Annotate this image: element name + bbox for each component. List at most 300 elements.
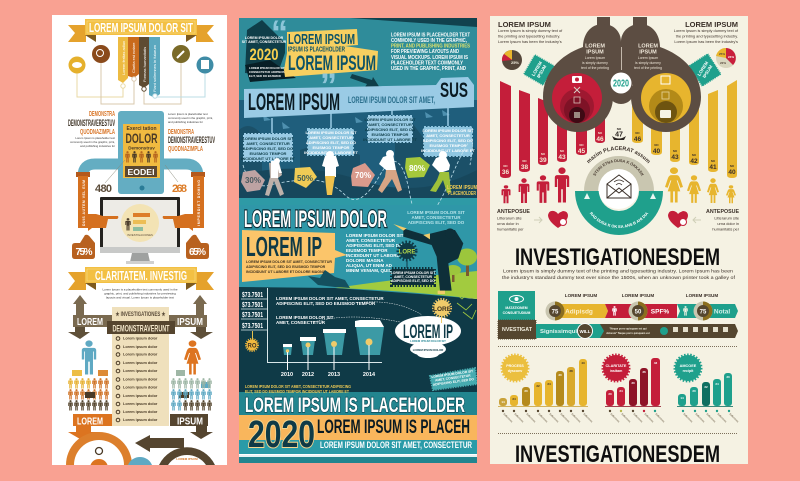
bar number labels	[502, 131, 604, 176]
stamp left: LOREM	[531, 60, 543, 77]
yellow bar chart: 20	[524, 389, 528, 393]
center 47 label: 47	[615, 132, 623, 138]
central list column: Lorem ipsum dolor	[123, 345, 158, 349]
red men figures	[502, 167, 569, 203]
yellow scene label: LOREM IPSUM	[447, 185, 477, 191]
segmented stat arrow	[546, 302, 738, 320]
top paragraph: USED IN THE GRAPHIC, PRINT, AND	[391, 66, 466, 72]
green hill	[335, 271, 477, 299]
bucket 2010: 2010	[281, 372, 293, 378]
intro paragraph: graphic, print, and publishing industries for previewing	[104, 292, 176, 296]
panel: right infographic: NO	[654, 143, 659, 147]
segmented stat arrow: 75	[700, 310, 707, 316]
callout 1: LOREM IPSUM DOLOR SIT	[242, 136, 294, 141]
small yellow note: LOREM IPSUM DOLOR SIT AMET, CONSECTETUR ADIPISCING	[245, 384, 351, 389]
upper right text: ADIPISCING ELIT, SED DO	[408, 220, 465, 225]
right antepositive block: urna dolor in	[717, 221, 739, 226]
lore burst: LORE	[433, 306, 452, 313]
yellow chart axis labels: Sollemnes	[559, 412, 571, 424]
phone: Exerci tation	[126, 126, 157, 132]
yellow chart axis labels: Sollemnes	[537, 412, 549, 424]
right intro copy: LOREM IPSUM	[685, 20, 738, 29]
panel: right infographic: NO	[673, 149, 678, 153]
bottom subline: LOREM IPSUM DOLOR SIT AMET, CONSECTETUR	[320, 440, 472, 451]
black burst callout: ADIPISCING ELIT, SED DO	[391, 279, 435, 283]
bottom title: INVESTIGATIONESDEM	[515, 441, 720, 468]
dashed walking path	[243, 141, 472, 219]
teal stamp callout: AMET, CONSECTETUR	[435, 373, 472, 382]
phone: Demonstrav	[128, 146, 155, 150]
dark title badge: ELIT, SED DO EIUSMOD	[249, 74, 281, 78]
center circular badge	[575, 146, 663, 235]
teal burst badge: AMCOEE	[680, 364, 697, 368]
callout 1: INCIDIDUNT UT LABORE ET	[241, 156, 295, 161]
monitor	[100, 197, 180, 264]
progress blobs: 80%	[409, 164, 425, 173]
callout 3: LOREM IPSUM DOLOR SIT	[364, 117, 416, 122]
central list column: Lorem ipsum dolor	[123, 402, 158, 406]
yellow burst badge: dysconv	[508, 369, 522, 373]
intro paragraph: layouts and visual. Lorem Ipsum is placeholder text	[106, 296, 174, 300]
light blue title band: LOREM IPSUM DOLOR SIT AMET,	[348, 95, 435, 105]
hanging tabs: Clarita est notare	[131, 42, 136, 73]
section heading: LOREM IPSUM DOLOR	[244, 206, 387, 233]
left intro copy: Lorem Ipsum has been the industry's	[498, 39, 562, 44]
bucket 2012: 2012	[302, 372, 314, 378]
thought cloud: LOREM IP	[403, 322, 453, 343]
panel: right infographic	[490, 16, 748, 464]
yellow bar chart: 14	[501, 400, 505, 404]
bar number labels: 46	[596, 136, 604, 143]
chart notes	[276, 296, 422, 325]
binocular labels	[581, 44, 662, 70]
callout 3: AMET, CONSECTETUR	[368, 122, 412, 127]
right intro copy: Lorem Ipsum is simply dummy text of	[674, 28, 739, 33]
quote marks	[274, 20, 334, 84]
red chart axis labels: Sollemnes	[643, 412, 655, 424]
callout 4	[421, 127, 475, 156]
small yellow note	[245, 384, 351, 394]
black burst callout: AMET, CONSECTETUR	[394, 275, 433, 279]
binocular labels: Lorem Ipsum	[638, 56, 658, 60]
progress blobs	[241, 157, 430, 192]
bottom orange gauge	[66, 432, 132, 465]
left copy	[68, 109, 115, 148]
lower dotted divider	[498, 432, 738, 434]
left copy: and publishing industries for	[80, 144, 115, 148]
red chart axis labels: Sollemnes	[609, 412, 621, 424]
center 47 label	[612, 127, 626, 140]
stamp left	[524, 55, 554, 85]
bar number labels: NO	[579, 143, 584, 147]
bar number labels: NO	[560, 149, 565, 153]
right arrows: ipsum	[168, 295, 213, 339]
black burst callout	[391, 269, 436, 285]
callout 2	[304, 129, 358, 155]
left intro copy	[498, 20, 563, 44]
right copy: QUODNAZIMPLA	[168, 144, 203, 153]
right copy	[168, 112, 215, 153]
red burst badge: CLARITATE	[606, 364, 627, 368]
bar number labels: NO	[503, 164, 508, 168]
second stat arrow row	[536, 324, 738, 338]
light blue title band: LOREM IPSUM	[248, 89, 340, 116]
icon circles	[68, 45, 214, 74]
central list column: Lorem ipsum dolor	[123, 336, 158, 340]
orange side bars: DUIS AUTEM VEL EUM	[82, 180, 86, 226]
red bar chart	[605, 358, 661, 407]
chart notes: LOREM IPSUM DOLOR SIT	[276, 315, 334, 320]
teal bar chart	[677, 373, 733, 407]
top paragraph: PRINT, AND PUBLISHING INDUSTRIES	[391, 44, 470, 50]
upper right text: AMET, CONSECTETUR	[411, 215, 461, 220]
left arrows: lorem: LOREM	[77, 317, 103, 328]
orange tag callout: ADIPISCING ELIT, SED DO EIUSMOD TEMPOR	[246, 265, 326, 269]
phone	[118, 111, 164, 194]
callout 4: ADIPISCING ELIT, SED DO	[423, 138, 473, 143]
stamp right	[689, 54, 721, 86]
outlined chevrons	[456, 294, 476, 319]
dark title badge: LOREM IPSUM DOLOR	[245, 36, 284, 40]
yellow bar chart: 24	[512, 397, 516, 401]
stamp left: IPSUM	[536, 64, 547, 79]
percent badges: 65%	[189, 247, 206, 258]
stat numbers	[95, 160, 187, 195]
chart notes: ADIPISCING ELIT, SED DO EIUSMOD TEMPOR	[276, 301, 376, 306]
panel: right infographic: NO	[730, 164, 735, 168]
teal bar chart: 20	[692, 389, 696, 393]
red burst badge	[603, 355, 629, 381]
phone: DOLOR	[126, 130, 158, 146]
pie right: 25%	[719, 52, 725, 56]
arrow row headers: LOREM IPSUM	[686, 293, 718, 298]
yellow headline block	[284, 29, 378, 77]
central list column: Lorem ipsum dolor	[123, 418, 158, 422]
bar number labels: NO	[598, 131, 603, 135]
binocular labels: is simply dummy	[582, 61, 608, 65]
right copy: and publishing industries for	[168, 120, 203, 124]
right copy: Lorem Ipsum is placeholder text	[168, 112, 208, 116]
thought cloud: LOREM IPSUM DOLOR SIT	[410, 339, 446, 343]
progress blobs: 30%	[245, 176, 261, 185]
year badge	[610, 72, 632, 94]
center circular badge: STERI ETNA DUSA K ÖKKASK	[593, 159, 644, 176]
callout 2: LOREM IPSUM DOLOR SIT	[305, 130, 357, 135]
central list column: Lorem ipsum dolor	[123, 394, 158, 398]
quote marks: ”	[320, 67, 337, 105]
pie left: 25%	[511, 60, 519, 65]
percent badges: 75%	[76, 247, 93, 258]
starburst lore tag: LORE	[399, 250, 415, 256]
central list column: Lorem ipsum dolor	[123, 410, 158, 414]
torn debris	[308, 270, 350, 288]
red bar chart: 24	[619, 389, 623, 393]
left antepositive block: humanitatis per	[497, 226, 524, 232]
hanging tabs: Fiant sollemnes in futurum	[152, 44, 157, 92]
arrow row headers: LOREM IPSUM	[565, 293, 597, 298]
woman figure	[184, 340, 201, 375]
y axis labels: $73.7501	[242, 310, 263, 319]
bar number labels: 38	[521, 164, 528, 171]
red chart axis labels: Sollemnes	[654, 412, 666, 424]
top ribbon banner: LOREM IPSUM DOLOR SIT	[89, 21, 193, 35]
binocular labels: IPSUM	[586, 50, 604, 56]
callout 2: AMET, CONSECTETUR	[309, 135, 353, 140]
teal stamp callout	[430, 368, 477, 390]
bar number labels: 39	[539, 157, 547, 164]
dark title badge	[242, 20, 296, 82]
binoculars	[543, 17, 701, 132]
main paragraph: Lorem Ipsum is simply dummy text of the printing and typesetting industry. Lorem Ipsum has been	[503, 268, 734, 274]
yellow chart axis labels: Sollemnes	[570, 412, 582, 424]
left copy: Lorem Ipsum is placeholder text	[75, 136, 115, 140]
year badge: 2020	[613, 78, 629, 90]
second ribbon banner: CLARITATEM. INVESTIG	[95, 269, 187, 283]
teal chart axis labels: Sollemnes	[682, 412, 694, 424]
teal middle section	[239, 205, 477, 298]
starburst lore tag	[399, 243, 415, 268]
yellow bar chart: 30	[558, 373, 562, 377]
middle white paragraph: ADIPISCING ELIT, SED DO	[346, 243, 403, 248]
teal stamp callout: LOREM IPSUM DOLOR SIT	[431, 369, 473, 379]
thought cloud: LOREM IPSUM DOLOR	[413, 348, 443, 352]
yellow scene label	[447, 185, 477, 197]
main paragraph: the industry's standard dummy text ever since the 1500s, when an unknown printer took a galley of	[502, 275, 736, 280]
dark title badge: 2020	[250, 45, 278, 64]
panel: left infographic	[52, 15, 227, 465]
teal chart axis labels	[682, 410, 740, 424]
bar number labels: 43	[558, 154, 566, 161]
center circular badge: mazim PLACERAT assum	[587, 146, 650, 164]
panel: right infographic: NO	[635, 131, 640, 135]
callout connectors	[272, 105, 448, 133]
light blue title band	[244, 77, 474, 118]
top ribbon banner	[68, 19, 214, 42]
panel: right infographic: NO	[692, 153, 697, 157]
middle white paragraph: INCIDIDUNT UT LABORE ET	[346, 253, 407, 258]
brown label box: NVESTIGAT	[502, 327, 533, 333]
y axis labels: $73.7501	[242, 290, 263, 299]
binocular labels: LOREM	[638, 44, 658, 50]
bucket 2014: 2014	[363, 372, 376, 378]
callout 3: INCIDIDUNT UT LABORE ET	[363, 137, 417, 142]
red bar chart: 43	[654, 361, 657, 365]
right lens	[641, 73, 691, 123]
left antepositive block: Litterarum site	[497, 216, 522, 220]
teal chart axis labels: Sollemnes	[694, 412, 706, 424]
red bar chart: 36	[642, 370, 646, 374]
panel: right infographic: 42	[690, 158, 698, 165]
teal label box	[498, 291, 535, 320]
top paragraph: VISUAL MOCKUPS. LOREM IPSUM IS	[391, 55, 468, 61]
small yellow note: ELIT, SED DO EIUSMOD TEMPOR INCIDIDUNT UT LABORE ET	[245, 389, 349, 394]
callout 4: INCIDIDUNT UT LABORE ET	[421, 148, 475, 153]
upper right text: LOREM IPSUM DOLOR SIT	[407, 210, 465, 215]
right people chart	[171, 370, 212, 411]
dark title badge: LOREM IPSUM DOLOR SIT AMET	[249, 66, 294, 70]
pie right: 22%	[720, 61, 726, 65]
pointing hands	[88, 214, 193, 231]
right copy: DEMONSTRA	[168, 127, 194, 136]
second stat arrow row: WILL	[580, 329, 591, 335]
callout 1: AMET, CONSECTETUR	[246, 141, 290, 146]
pie right: 24%	[728, 55, 734, 59]
callout 1: ADIPISCING ELIT, SED DO	[243, 146, 293, 151]
binocular labels: IPSUM	[639, 50, 657, 56]
red bars	[500, 81, 605, 178]
left antepositive block: ANTEPOSUE	[497, 209, 530, 215]
kicking silhouette	[393, 224, 463, 294]
right copy: commonly used in the graphic, print,	[168, 116, 213, 120]
yellow burst badge	[502, 355, 528, 381]
ro burst: RO	[248, 344, 257, 350]
panel: left infographic: DEMONSTRAVERESTUV	[168, 135, 215, 145]
connector lines	[77, 63, 205, 104]
right antepositive block: Litterarum site	[714, 216, 739, 220]
yellow headline block: LOREM IPSUM	[288, 52, 376, 75]
chart notes: LOREM IPSUM DOLOR SIT AMET, CONSECTETUR	[276, 296, 384, 301]
panel: left infographic: DEMONSTRAVERESTUV	[68, 118, 115, 128]
pipes	[83, 164, 198, 176]
left antepositive block	[497, 209, 568, 232]
central list column: DEMONSTRAVERUNT	[112, 324, 170, 334]
hanging tabs: Formas humanitatis	[142, 47, 147, 82]
central list column: Lorem ipsum dolor	[123, 361, 158, 365]
chevron arrow	[350, 74, 379, 86]
dotted divider	[498, 346, 738, 348]
callout 3: ADIPISCING ELIT, SED DO	[365, 127, 415, 132]
main title: INVESTIGATIONESDEM	[515, 244, 720, 271]
left copy: DEMONSTRA	[89, 109, 115, 118]
quote marks: “	[271, 14, 288, 52]
panel: right infographic: NO	[711, 159, 716, 163]
hanging tabs: Lorem feritas adiuv	[121, 41, 126, 75]
callout 4: AMET, CONSECTETUR	[426, 133, 470, 138]
teal chart axis labels: Sollemnes	[728, 412, 740, 424]
top paragraph: FOR PREVIEWING LAYOUTS AND	[391, 49, 459, 55]
lore burst	[433, 300, 452, 323]
light blue title band: SUS	[440, 79, 468, 102]
teal bar chart: 22	[704, 385, 708, 389]
bottom brown gauge with arrow: LOREM IPSUM	[176, 457, 198, 461]
callout 2: EIUSMOD TEMPOR	[313, 145, 350, 150]
binocular labels: LOREM	[585, 44, 605, 50]
stamp right: IPSUM	[702, 64, 714, 79]
ro burst	[246, 331, 258, 350]
callout 3: EIUSMOD TEMPOR	[372, 132, 409, 137]
yellow chart axis labels: Sollemnes	[502, 412, 514, 424]
yellow women figures	[665, 167, 736, 203]
man figure	[82, 340, 96, 375]
binocular labels: Lorem Ipsum	[585, 56, 605, 60]
bottom blue semicircle	[128, 457, 152, 465]
yellow chart axis labels: Sollemnes	[525, 412, 537, 424]
binocular labels: is simply dummy	[635, 61, 661, 65]
middle white paragraph: ALIQUA, UT ENIM AD	[346, 263, 393, 268]
segmented stat arrow: Adipisdg	[565, 308, 593, 316]
orange tag callout: LOREM IP	[246, 231, 322, 262]
progress blobs: 70%	[355, 171, 371, 180]
middle white paragraph	[346, 233, 407, 273]
teal label box: MATATIONEM	[505, 306, 528, 310]
red chart axis labels: Sollemnes	[620, 412, 632, 424]
intro paragraph	[102, 288, 178, 299]
bucket 2010	[281, 344, 293, 378]
panel: right infographic: 40	[653, 148, 660, 155]
left copy: commonly used in the graphic, print,	[70, 140, 115, 144]
left people chart	[68, 370, 109, 411]
yellow headline block: LOREM IPSUM	[288, 31, 355, 48]
middle white paragraph: LOREM IPSUM DOLOR SIT	[346, 233, 404, 238]
walkers	[265, 150, 451, 196]
second ribbon banner	[68, 267, 214, 290]
binocular labels: text of the printing	[634, 66, 662, 70]
teal bar chart: 14	[680, 396, 684, 400]
right antepositive block	[668, 209, 740, 232]
left copy: QUODNAZIMPLA	[80, 127, 115, 136]
monitor: INVESTIGACIONES	[127, 233, 153, 237]
yellow bar chart	[498, 359, 588, 407]
yellow bar chart: 24	[547, 382, 551, 386]
callout 1: EIUSMOD TEMPOR	[250, 151, 287, 156]
teal label box: CONSUETUDIUM	[503, 311, 531, 315]
right intro copy: the printing and typesetting industry.	[676, 34, 738, 38]
chart notes: AMET, CONSECTETUR	[276, 320, 326, 325]
arrow row headers	[565, 293, 718, 298]
lower lorem arrow: LOREM	[77, 416, 103, 428]
stat numbers: 268	[172, 183, 187, 195]
yellow bar chart: 22	[536, 384, 540, 388]
dark lower section	[239, 287, 477, 392]
teal stamp callout: ADIPISCING ELIT, SED DO	[433, 377, 475, 387]
callout 4: LOREM IPSUM DOLOR SIT	[422, 128, 474, 133]
black burst callout: LOREM IPSUM DOLOR SIT	[391, 271, 436, 275]
bottom white headline: LOREM IPSUM IS PLACEHOLDER	[245, 394, 465, 417]
left lens	[552, 73, 602, 123]
second stat arrow row: dolorem" Neque porro quisquam est	[606, 332, 650, 335]
bottom brown gauge with arrow	[135, 435, 215, 465]
arrow row headers: LOREM IPSUM	[622, 293, 654, 298]
left intro copy: Lorem Ipsum is simply dummy text of	[498, 28, 563, 33]
middle white paragraph: DOLORE MAGNA	[346, 258, 384, 263]
yellow scene label: PLACEHOLDER	[448, 191, 476, 197]
big year: 2020	[248, 414, 315, 456]
top paragraph: PLACEHOLDER TEXT COMMONLY	[391, 60, 463, 66]
red burst badge: insitam	[610, 369, 622, 373]
blue illustrated scene	[239, 100, 477, 206]
top paragraph: COMMONLY USED IN THE GRAPHIC,	[391, 38, 467, 44]
segmented stat arrow: Notal	[714, 308, 730, 316]
center 47 label: NO	[617, 127, 622, 131]
stat numbers: 480	[95, 183, 112, 195]
orange side bars: IMPERDIET DOMING	[197, 180, 201, 226]
bucket 2013: 2013	[328, 372, 340, 378]
yellow chart axis labels: Sollemnes	[582, 412, 594, 424]
bucket 2013	[323, 329, 346, 378]
middle white paragraph: EIUSMOD TEMPOR	[346, 248, 388, 253]
yellow bar chart: 43	[581, 361, 585, 365]
teal chart axis labels: Sollemnes	[705, 412, 717, 424]
red bar chart: 20	[608, 392, 612, 396]
central list column: Lorem ipsum dolor	[123, 369, 158, 373]
upper right text	[407, 210, 465, 225]
binocular labels: text of the printing	[581, 66, 609, 70]
yellow bars	[632, 80, 737, 178]
segmented stat arrow: 75	[552, 310, 559, 316]
lower ipsum arrow	[170, 414, 213, 439]
panel: right infographic: 40	[728, 169, 736, 176]
yellow headline block: IPSUM IS PLACEHOLDER	[288, 46, 345, 54]
